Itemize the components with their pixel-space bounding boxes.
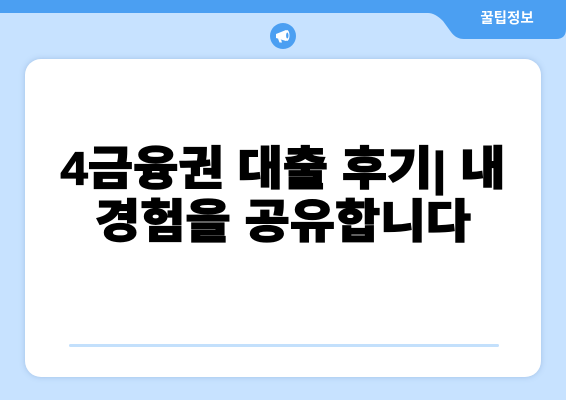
- tab label: 꿀팁정보: [480, 11, 534, 27]
- title: 4금융권 대출 후기| 내: [60, 144, 506, 195]
- top tab banner: [0, 0, 566, 39]
- divider line: [69, 344, 499, 347]
- title: 경험을 공유합니다: [95, 196, 471, 247]
- icon: megaphone: [270, 23, 296, 49]
- panel: white card: [25, 59, 541, 377]
- title: [60, 144, 506, 247]
